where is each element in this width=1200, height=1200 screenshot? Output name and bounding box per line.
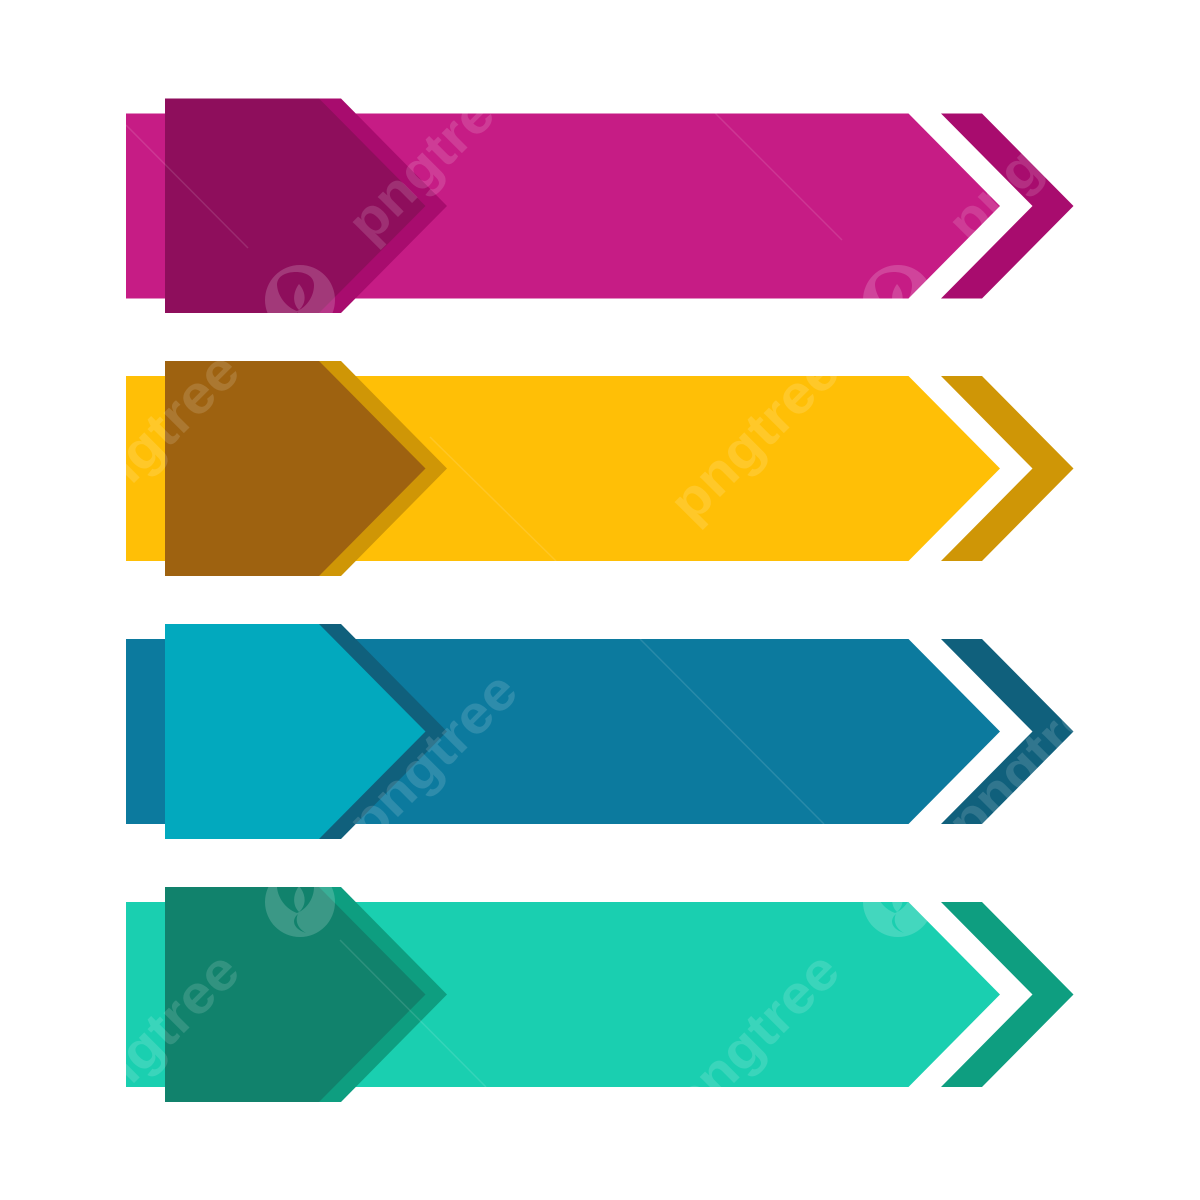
end chevron xyxy=(941,639,1074,824)
banner 1: magenta xyxy=(126,98,1074,313)
watermark words: pngtree xyxy=(936,660,1129,853)
end chevron xyxy=(941,376,1074,561)
watermark diagonal lines xyxy=(126,113,842,1087)
back tab xyxy=(165,624,447,839)
front tab xyxy=(165,98,426,313)
watermark words: pngtree xyxy=(936,60,1129,253)
watermark words: pngtree xyxy=(658,340,851,533)
front tab xyxy=(165,361,426,576)
main arrow bar xyxy=(126,902,1000,1087)
watermark words: pngtree xyxy=(658,940,851,1133)
back tab xyxy=(165,361,447,576)
end chevron xyxy=(941,114,1074,298)
back tab xyxy=(165,887,447,1102)
watermark logos xyxy=(265,265,933,937)
front tab xyxy=(165,887,426,1102)
banner 2: yellow xyxy=(126,361,1074,576)
watermark words: pngtree xyxy=(336,660,529,853)
banner 4: teal xyxy=(126,887,1074,1102)
main arrow bar xyxy=(126,114,1000,298)
main arrow bar xyxy=(126,639,1000,824)
end chevron xyxy=(941,902,1074,1087)
front tab xyxy=(165,624,426,839)
watermark words: pngtree xyxy=(336,60,529,253)
back tab xyxy=(165,98,447,313)
main arrow bar xyxy=(126,376,1000,561)
watermark layer xyxy=(58,60,1129,1133)
banner 3: blue xyxy=(126,624,1074,839)
watermark words: pngtree xyxy=(58,340,251,533)
watermark words xyxy=(58,60,1129,1133)
watermark words: pngtree xyxy=(58,940,251,1133)
